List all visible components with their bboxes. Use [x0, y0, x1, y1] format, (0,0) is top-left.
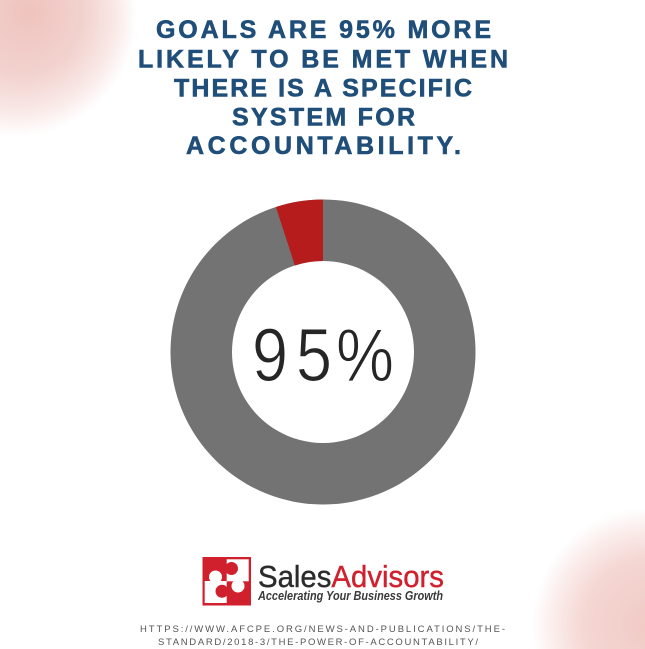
- source url: STANDARD/2018-3/THE-POWER-OF-ACCOUNTABILITY/: [158, 637, 478, 648]
- logo: SalesAdvisors: [202, 557, 444, 606]
- source url: HTTPS://WWW.AFCPE.ORG/NEWS-AND-PUBLICATIONS/THE-: [140, 624, 505, 635]
- title: LIKELY TO BE MET WHEN: [138, 46, 508, 74]
- title: [138, 16, 508, 160]
- title: GOALS ARE 95% MORE: [156, 16, 491, 44]
- icon: puzzle pieces: [202, 557, 251, 606]
- logo wordmark: SalesAdvisors: [258, 559, 444, 594]
- title: SYSTEM FOR: [232, 104, 415, 132]
- donut segment: 5% red: [276, 200, 323, 266]
- title: THERE IS A SPECIFIC: [174, 74, 472, 102]
- source url: [140, 624, 505, 648]
- donut chart: [171, 200, 476, 504]
- donut value: %: [336, 313, 394, 397]
- logo tagline: Accelerating Your Business Growth: [257, 589, 443, 603]
- donut segment: 95% grey: [171, 200, 476, 504]
- donut value: 9: [252, 313, 288, 397]
- donut value: [252, 313, 394, 397]
- donut value: 5: [296, 313, 332, 397]
- title: ACCOUNTABILITY.: [186, 132, 461, 160]
